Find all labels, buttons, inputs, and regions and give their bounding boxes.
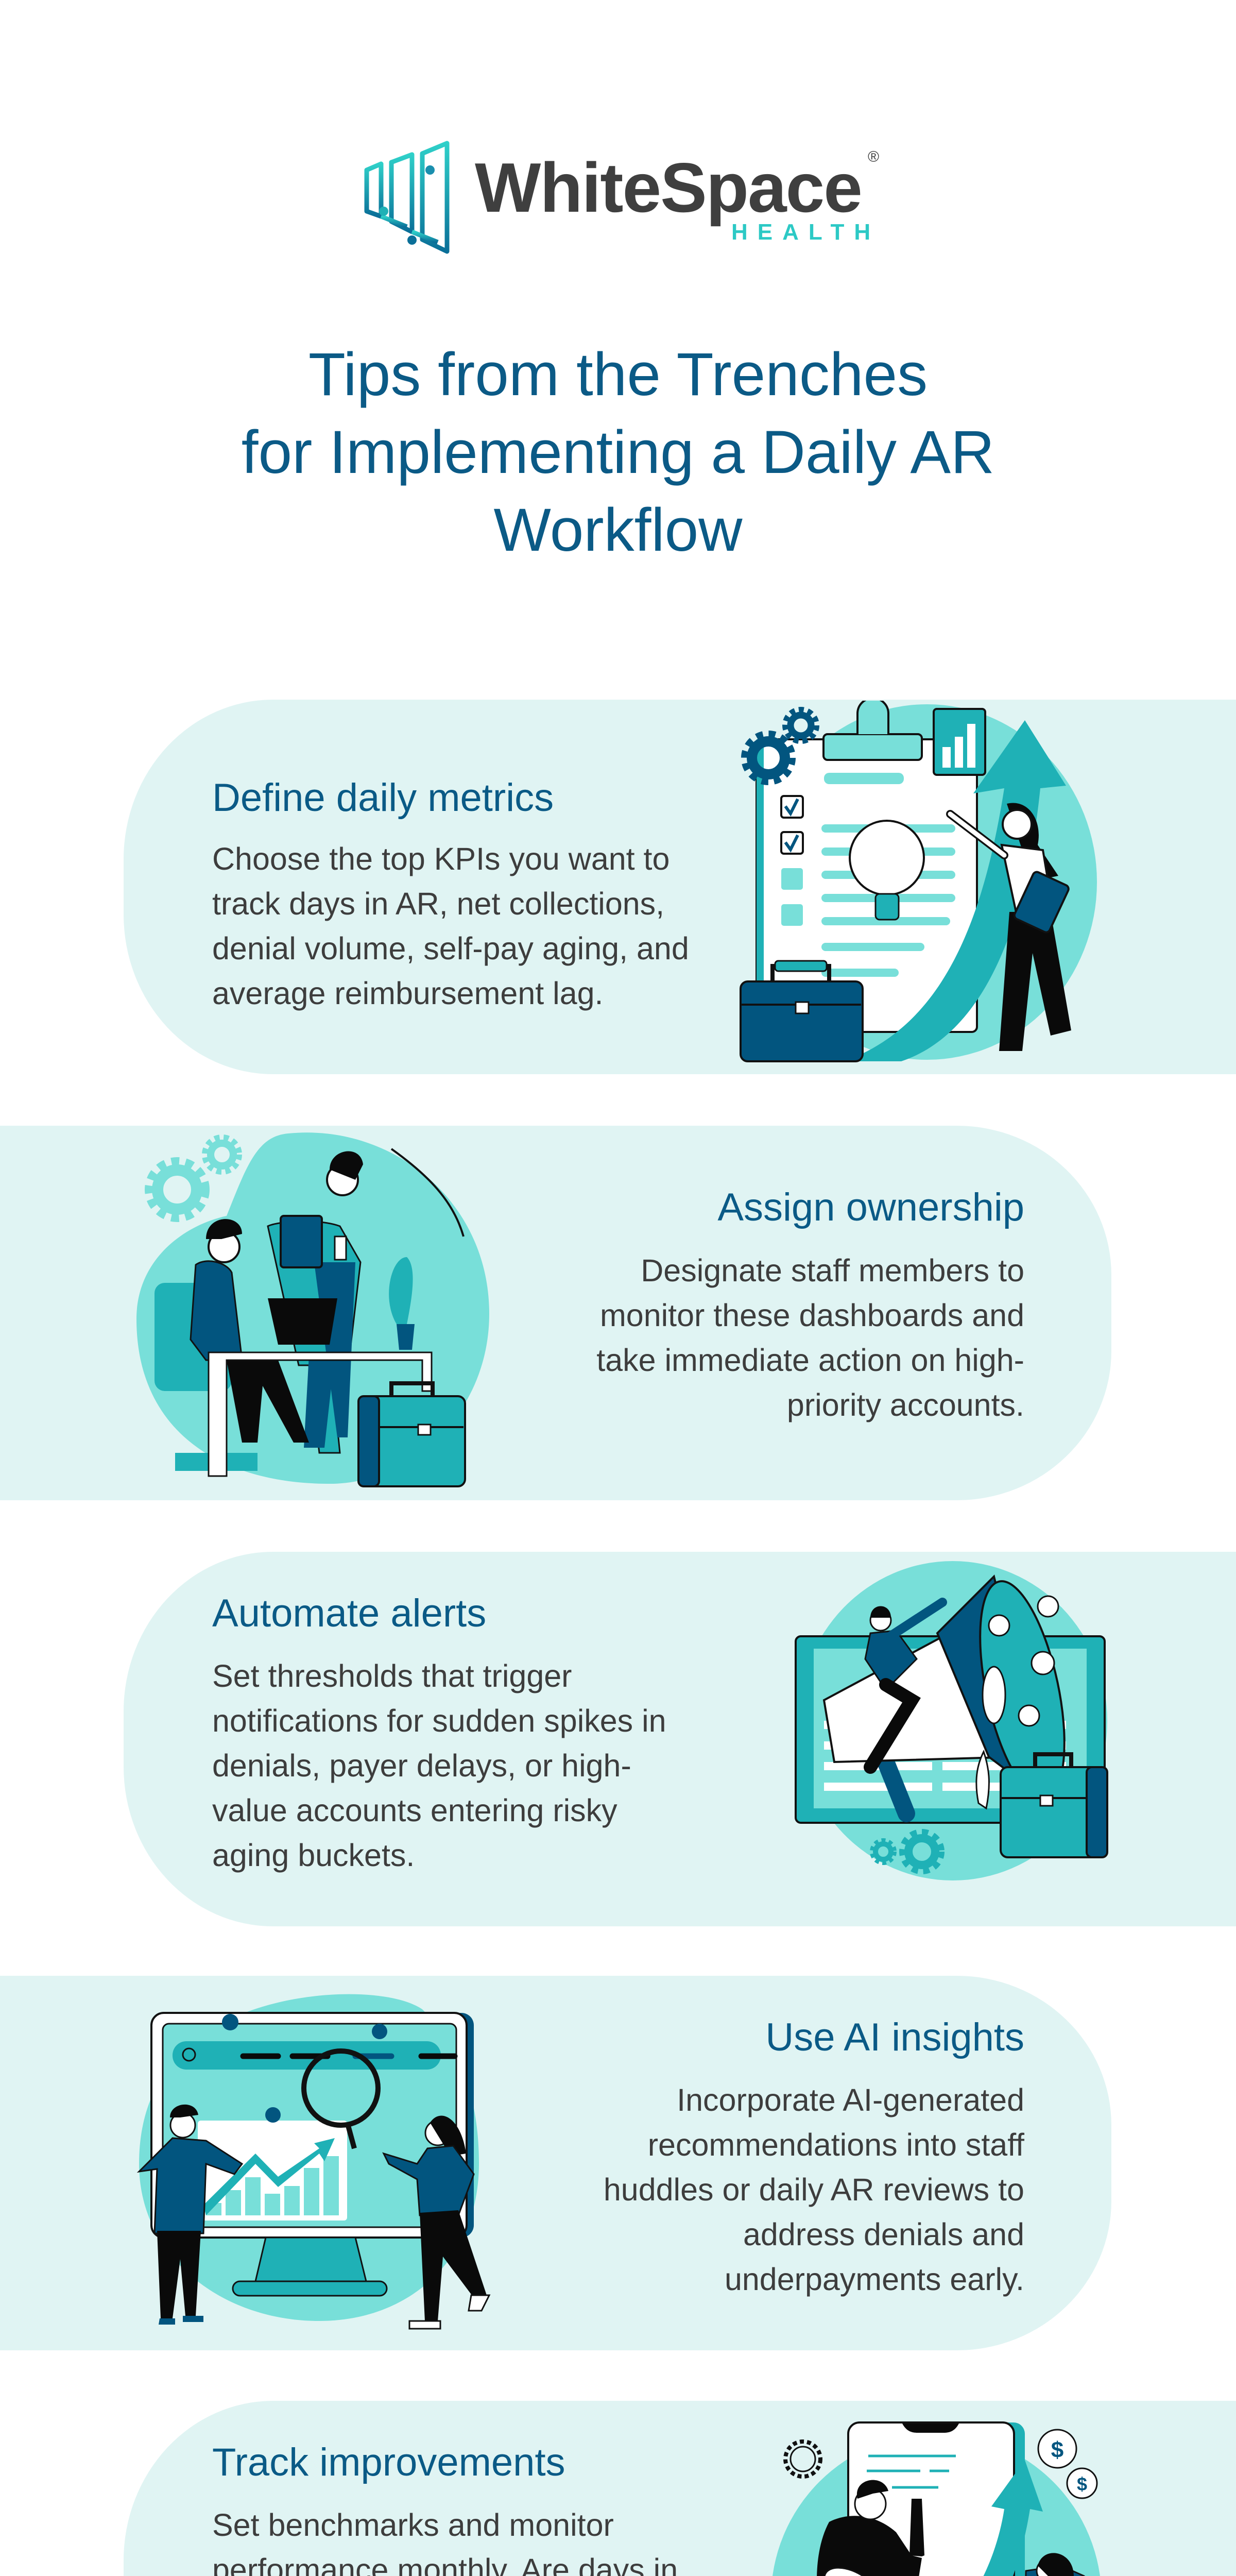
illustration: clipboard with lightbulb and woman [740, 701, 1097, 1062]
title [242, 341, 994, 564]
title: Tips from the Trenches [308, 341, 928, 409]
panel: define daily metrics [124, 700, 1236, 1074]
text block: automate alerts: Set thresholds that trigger [212, 1658, 572, 1693]
heading: track improvements: Track improvements [212, 2441, 565, 2484]
icon: logo mark [365, 141, 449, 253]
panel: track improvements [124, 2401, 1236, 2576]
text block: assign ownership: take immediate action on high- [596, 1343, 1024, 1378]
text block: use AI insights [604, 2082, 1025, 2297]
heading: automate alerts: Automate alerts [212, 1591, 486, 1635]
text block: use AI insights: underpayments early. [725, 2262, 1024, 2297]
text block: define daily metrics [212, 841, 689, 1011]
text block: automate alerts: value accounts entering risky [212, 1793, 617, 1828]
text block: assign ownership: Designate staff members to [641, 1253, 1024, 1288]
logo [365, 141, 880, 253]
text block: assign ownership [596, 1253, 1024, 1422]
text block: use AI insights: Incorporate AI-generated [677, 2082, 1024, 2117]
heading: use AI insights: Use AI insights [765, 2015, 1024, 2059]
text block: assign ownership: monitor these dashboards and [600, 1298, 1024, 1333]
text block: use AI insights: huddles or daily AR reviews to [604, 2172, 1024, 2207]
logo text: WhiteSpace [475, 148, 862, 227]
text block: track improvements: Set benchmarks and monitor [212, 2507, 614, 2543]
logo: HEALTH [731, 219, 880, 245]
logo: ® [868, 148, 879, 165]
illustration: two people at desk [136, 1132, 489, 1487]
text block: automate alerts: denials, payer delays, or high- [212, 1748, 631, 1783]
text block: assign ownership: priority accounts. [787, 1387, 1024, 1422]
illustration: megaphone alert [795, 1561, 1108, 1880]
title: Workflow [493, 496, 743, 564]
panel: use AI insights [0, 1976, 1111, 2350]
illustration: phone with growth arrow and coins: $ [1051, 2437, 1063, 2463]
panel: automate alerts [124, 1552, 1236, 1926]
text block: automate alerts [212, 1658, 666, 1873]
panel: assign ownership [0, 1126, 1111, 1500]
text block: define daily metrics: Choose the top KPIs you want to [212, 841, 670, 876]
illustration: phone with growth arrow and coins [772, 2421, 1100, 2576]
text block: use AI insights: address denials and [743, 2217, 1024, 2252]
text block: use AI insights: recommendations into staff [648, 2127, 1024, 2162]
text block: define daily metrics: track days in AR, net collections, [212, 886, 664, 921]
title: for Implementing a Daily AR [242, 418, 994, 486]
text block: automate alerts: notifications for sudden spikes in [212, 1703, 666, 1738]
illustration: monitor with analytics and two people [137, 1994, 490, 2330]
text block: define daily metrics: average reimbursement lag. [212, 976, 604, 1011]
heading: assign ownership: Assign ownership [717, 1185, 1024, 1229]
illustration: phone with growth arrow and coins: $ [1077, 2473, 1087, 2495]
heading: define daily metrics: Define daily metrics [212, 776, 554, 820]
text block: define daily metrics: denial volume, self-pay aging, and [212, 931, 689, 966]
text block: automate alerts: aging buckets. [212, 1838, 415, 1873]
text block: track improvements [212, 2507, 678, 2576]
